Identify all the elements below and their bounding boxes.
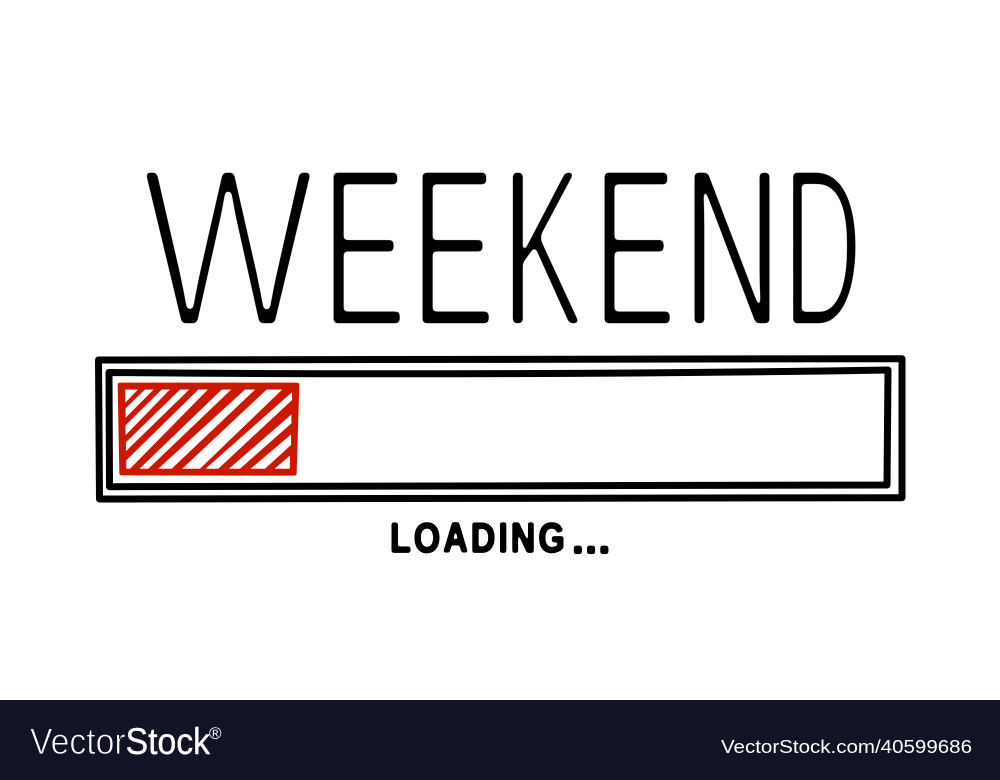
title: WEEKEND: D <box>784 120 861 375</box>
title: WEEKEND <box>141 120 861 375</box>
title: WEEKEND: K <box>502 121 584 374</box>
red progress fill <box>118 383 299 476</box>
title: WEEKEND: E <box>412 120 495 374</box>
title: WEEKEND: E <box>322 120 406 374</box>
registered mark: ® <box>209 724 222 743</box>
title: WEEKEND: W <box>141 121 315 374</box>
label: LOADING...: ... <box>572 515 612 562</box>
title: WEEKEND: N <box>682 120 781 374</box>
label: LOADING...: LOADING <box>390 515 568 562</box>
footer band <box>0 700 1000 780</box>
footer id: VectorStock.com/40599686 <box>721 736 972 757</box>
bar outer frame <box>98 359 902 499</box>
progress bar <box>98 359 902 499</box>
footer logo: VectorStock <box>30 721 210 762</box>
bar inner frame <box>109 370 888 487</box>
title: WEEKEND: E <box>594 121 676 374</box>
